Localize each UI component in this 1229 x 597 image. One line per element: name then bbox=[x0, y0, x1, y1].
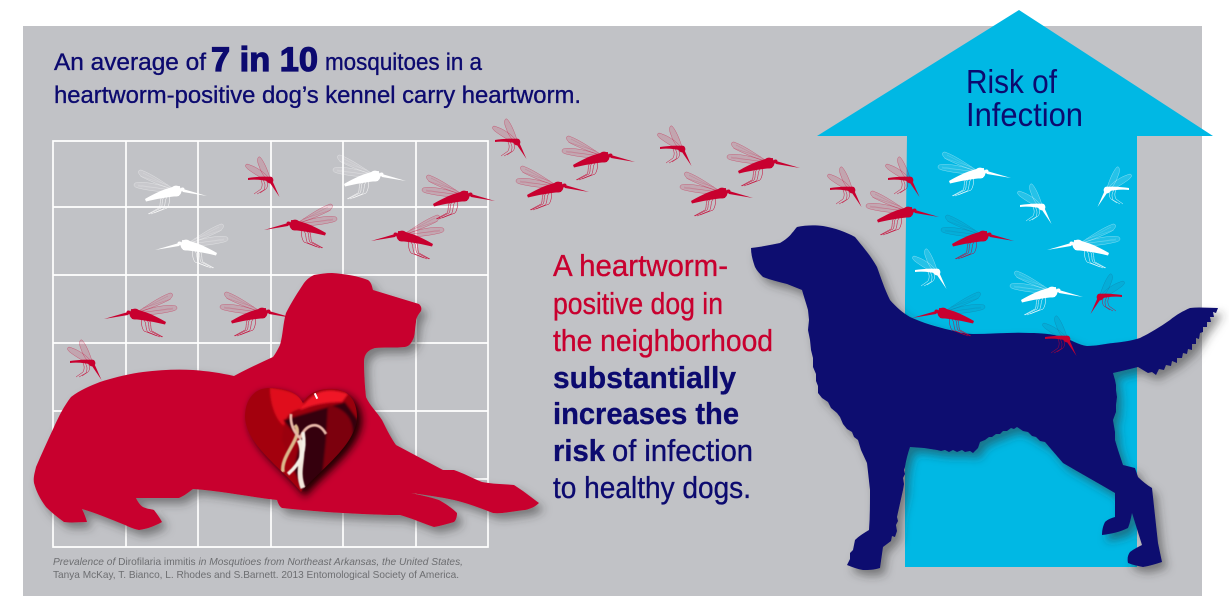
citation: Prevalence of Dirofilaria immitis in Mosqutioes from Northeast Arkansas, the United States, bbox=[53, 556, 463, 568]
arrow: risk of infection rising bbox=[817, 10, 1213, 567]
text block: key message: positive dog in bbox=[553, 286, 723, 321]
heading: An average of bbox=[54, 49, 206, 76]
text block: key message: to healthy dogs. bbox=[553, 470, 751, 505]
text block: key message: substantially bbox=[553, 360, 737, 395]
heading: mosquitoes in a bbox=[325, 49, 483, 76]
text block: key message: of infection bbox=[612, 433, 753, 468]
arrow label: Infection bbox=[966, 96, 1083, 133]
arrow label: Risk of bbox=[966, 63, 1058, 100]
heading bbox=[54, 41, 581, 109]
mosquitoes inside the risk arrow bbox=[912, 152, 1131, 356]
text block: key message: the neighborhood bbox=[553, 323, 773, 358]
arrow label bbox=[966, 63, 1083, 133]
citation: Tanya McKay, T. Bianco, L. Rhodes and S.Barnett. 2013 Entomological Society of America. bbox=[53, 569, 459, 581]
text block: key message: A heartworm- bbox=[553, 248, 728, 283]
navy dog silhouette (healthy, standing) bbox=[751, 225, 1218, 570]
red dog silhouette (infected, lying down) bbox=[34, 273, 539, 530]
mosquitoes flying between the dogs bbox=[493, 119, 939, 235]
heading: heartworm-positive dog’s kennel carry heartworm. bbox=[54, 82, 581, 109]
chart: 10 by 10 style grid bbox=[53, 141, 488, 547]
icon: heart with heartworms bbox=[240, 385, 362, 497]
text block: key message: increases the bbox=[553, 396, 739, 431]
text block: key message bbox=[553, 248, 773, 505]
citation bbox=[53, 556, 463, 581]
text block: key message: risk bbox=[553, 433, 606, 468]
heading: 7 in 10 bbox=[211, 41, 318, 79]
mosquitoes inside the grid bbox=[68, 155, 495, 380]
